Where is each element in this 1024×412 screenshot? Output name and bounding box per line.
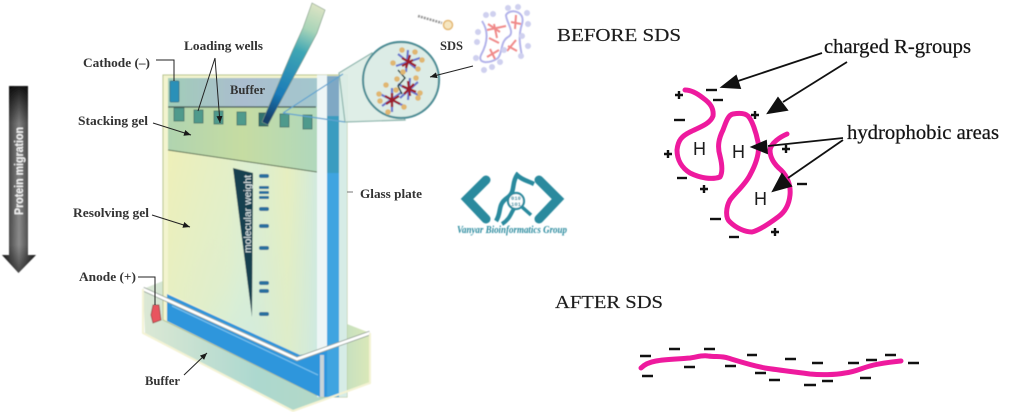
label: SDS: SDS [440, 38, 463, 53]
label: Anode: Anode (+) [79, 269, 136, 284]
SDS molecule [418, 16, 452, 30]
gel apparatus illustration [143, 3, 531, 411]
negative charges along chain [640, 349, 919, 385]
label: Cathode: Cathode (–) [83, 55, 150, 70]
logo: Vanyar Bioinformatics Group: Vanyar Bioinformatics Group [457, 224, 567, 236]
anode leader line [138, 277, 155, 305]
stacking gel arrow [153, 123, 191, 135]
H labels: H [693, 139, 706, 159]
cathode leader line [156, 60, 174, 81]
tank outline and white rim [143, 289, 370, 359]
stacking gel [168, 107, 317, 172]
label: lower Buffer: Buffer [145, 373, 180, 388]
arrows: charged R-groups [722, 53, 847, 113]
folded protein chain [677, 90, 790, 232]
anode electrode [151, 305, 161, 323]
label: Loading wells: Loading wells [184, 38, 263, 53]
unfolded protein illustration [473, 4, 531, 73]
protein migration arrow [2, 86, 36, 273]
protein migration arrow: Protein migration [14, 127, 26, 215]
magnifier cone [339, 53, 405, 122]
lower blue buffer band [167, 294, 327, 397]
denatured protein chain [641, 356, 901, 375]
pipette [262, 3, 325, 125]
note: charged R-groups: charged R-groups [824, 36, 971, 58]
heading: BEFORE SDS: BEFORE SDS [557, 25, 681, 45]
magnified SDS-coated protein [363, 42, 439, 118]
note: hydrophobic areas: hydrophobic areas [847, 122, 999, 144]
H labels: H [754, 189, 767, 209]
side glass strips [317, 75, 347, 397]
upper buffer [168, 78, 318, 108]
label: Resolving gel: Resolving gel [73, 205, 149, 220]
molecular weight wedge [233, 168, 254, 317]
resolving gel arrow [152, 215, 190, 227]
buffer tank back [143, 281, 370, 411]
glass plate tick [347, 191, 353, 193]
H labels [693, 139, 767, 209]
label: upper Buffer: Buffer [230, 82, 265, 97]
molecular weight wedge: molecular weight [243, 175, 254, 253]
cathode electrode [170, 81, 179, 102]
glass plate outer frame [163, 75, 347, 397]
charge signs on folded protein [664, 90, 807, 237]
SDS arrow [430, 66, 473, 77]
comb line and loading wells [168, 107, 316, 129]
logo: Vanyar Bioinformatics Group: 101 [511, 201, 522, 208]
resolving gel [168, 150, 317, 355]
marker bands [259, 174, 269, 316]
label: Stacking gel: Stacking gel [78, 113, 148, 128]
logo: Vanyar Bioinformatics Group [457, 175, 567, 236]
logo: Vanyar Bioinformatics Group: 010 [511, 195, 521, 202]
lower buffer arrow [184, 353, 207, 375]
H labels: H [732, 142, 745, 162]
loading wells arrows [198, 58, 220, 123]
arrows: hydrophobic areas [752, 138, 843, 191]
heading: AFTER SDS: AFTER SDS [555, 292, 663, 312]
label: Glass plate: Glass plate [360, 186, 422, 201]
